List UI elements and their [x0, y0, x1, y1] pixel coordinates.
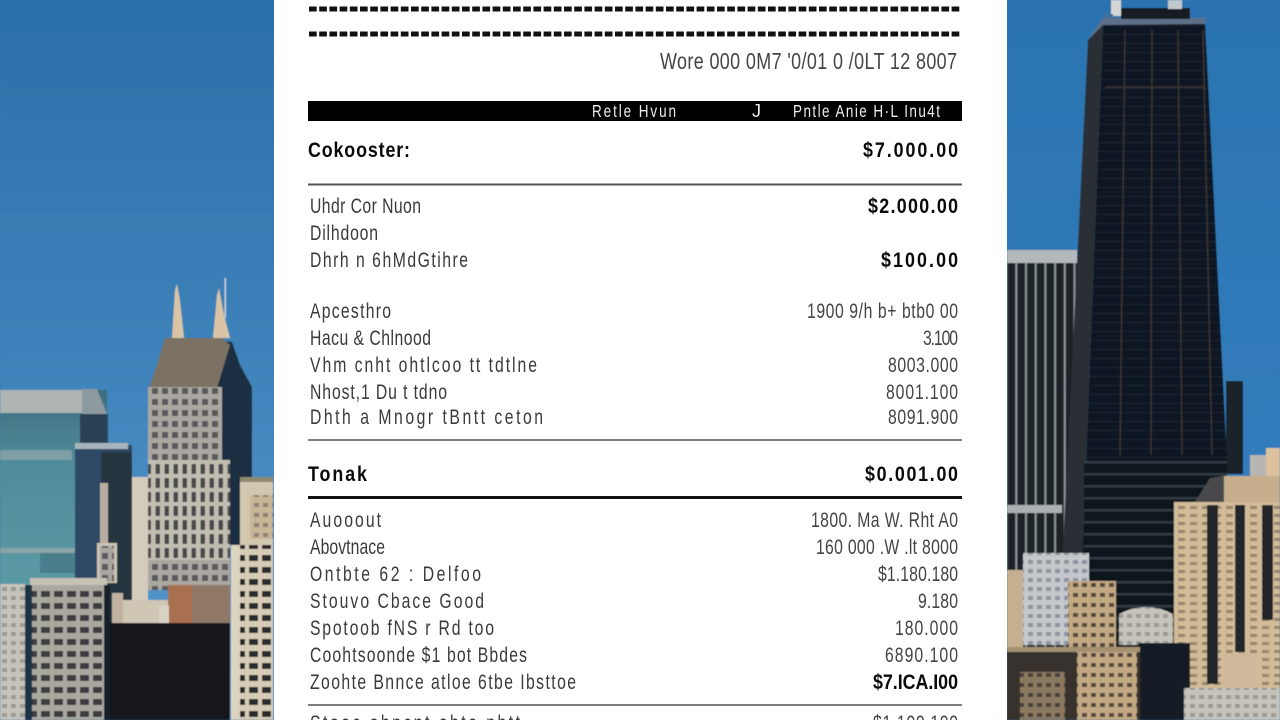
line items group 3: Stouvo Cbace Good: [310, 589, 484, 613]
line items group 3: 6890.100: [885, 643, 958, 667]
section heading row: [308, 139, 958, 162]
line items group 2: [310, 299, 958, 429]
line items group 3: Ontbte 62 : Delfoo: [310, 562, 481, 586]
building: far-left pale block: [0, 584, 25, 720]
line items group 1: [310, 194, 958, 272]
line items group 3: 9.180: [918, 589, 958, 613]
line items group 3: 1800. Ma W. Rht A0: [811, 508, 958, 532]
line items group 3: Spotoob fNS r Rd too: [310, 616, 494, 640]
building: low tan foreground: [1007, 647, 1140, 720]
receipt meta line: Wore 000 0M7 '0/01 0 /0LT 12 8007: [660, 49, 957, 75]
building: dark blue annex: [75, 443, 132, 630]
building: striped tower: [1007, 250, 1077, 650]
black table header: J: [752, 101, 761, 121]
building: cream tower right: [1174, 448, 1280, 688]
building: twin-spire tower: [123, 278, 252, 626]
line items group 1: Dilhdoon: [310, 221, 378, 245]
black table header: [308, 101, 962, 122]
line items group 2: Hacu & Chlnood: [310, 326, 431, 350]
black table header: Pntle Anie H·L Inu4t: [793, 102, 940, 122]
building: foreground windows block: [25, 578, 110, 720]
building: brick block: [159, 585, 230, 635]
building: dark tapered skyscraper: [1063, 0, 1227, 650]
dashed rules: [309, 9, 961, 34]
line items group 3: Coohtsoonde $1 bot Bbdes: [310, 643, 527, 667]
line items group 3: Auooout: [310, 508, 382, 532]
building: cream podium: [1184, 654, 1280, 720]
line items group 2: 3.100: [923, 326, 958, 350]
line items group 3: $7.ICA.I00: [873, 671, 958, 694]
line items group 2: Dhth a Mnogr tBntt ceton: [310, 405, 543, 429]
panel: white receipt: [274, 0, 1007, 720]
total row: $0.001.00: [865, 463, 958, 486]
building: dark block foreground: [107, 623, 230, 720]
line items group 2: Nhost,1 Du t tdno: [310, 380, 447, 404]
building: tan block: [1068, 581, 1116, 648]
line items group 3: $1.180.180: [878, 562, 958, 586]
building: pale blue-grey block: [1007, 553, 1089, 648]
line items group 3: [310, 508, 958, 694]
line items group 1: $100.00: [881, 249, 958, 272]
line items group 2: 8091.900: [888, 405, 958, 429]
line items group 2: 1900 9/h b+ btb0 00: [807, 299, 958, 323]
line items group 3: Zoohte Bnnce atloe 6tbe Ibsttoe: [310, 670, 576, 694]
line items group 3: 160 000 .W .lt 8000: [816, 535, 958, 559]
total row: [308, 463, 958, 486]
section heading row: Cokooster:: [308, 139, 410, 162]
line items group 2: 8003.000: [888, 353, 958, 377]
line items group 2: 8001.100: [886, 380, 958, 404]
panel: right skyline photo: [1007, 0, 1280, 720]
building: small dark tower: [1226, 381, 1243, 474]
line items group 2: Apcesthro: [310, 299, 391, 323]
building: glass tower: [0, 389, 108, 585]
black table header: Retle Hvun: [592, 102, 676, 122]
total row: Tonak: [308, 463, 367, 486]
building: low dark roofs: [1138, 643, 1190, 720]
clipped final row: [310, 711, 958, 720]
line items group 3: Abovtnace: [310, 535, 385, 559]
line items group 1: $2.000.00: [868, 195, 958, 218]
section heading row: $7.000.00: [863, 139, 958, 162]
line items group 3: 180.000: [895, 616, 958, 640]
line items group 1: Dhrh n 6hMdGtihre: [310, 248, 468, 272]
building: cream tower right edge: [231, 477, 273, 720]
line items group 2: Vhm cnht ohtlcoo tt tdtlne: [310, 353, 537, 377]
line items group 1: Uhdr Cor Nuon: [310, 194, 421, 218]
panel: left skyline photo: [0, 0, 274, 720]
building: domed block: [1119, 607, 1173, 645]
